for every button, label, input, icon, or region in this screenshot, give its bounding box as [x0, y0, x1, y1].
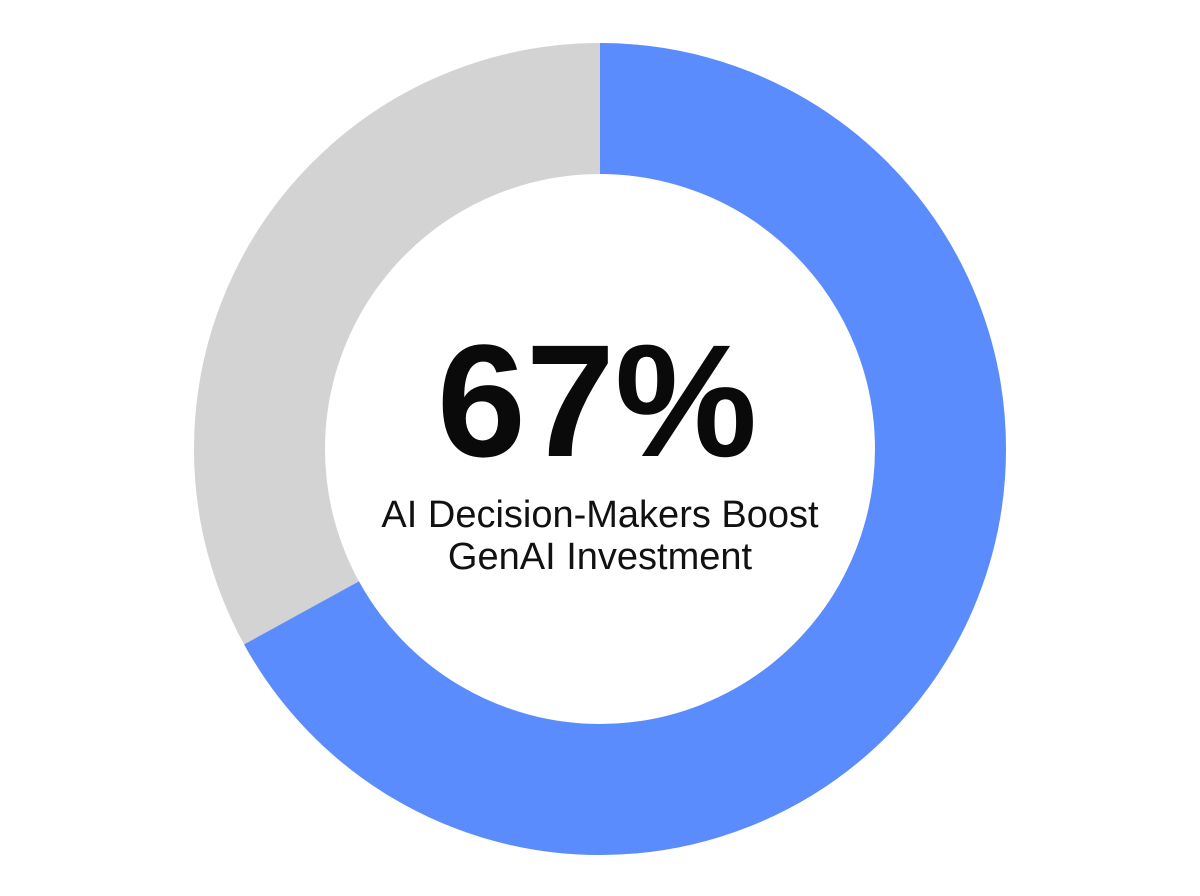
big number: 67%	[437, 311, 757, 490]
subtitle	[381, 494, 819, 578]
ring segment: remaining 33%	[260, 108, 940, 790]
ring segment: 67%	[260, 108, 940, 790]
subtitle: GenAI Investment	[448, 536, 753, 578]
subtitle: AI Decision-Makers Boost	[381, 494, 819, 536]
